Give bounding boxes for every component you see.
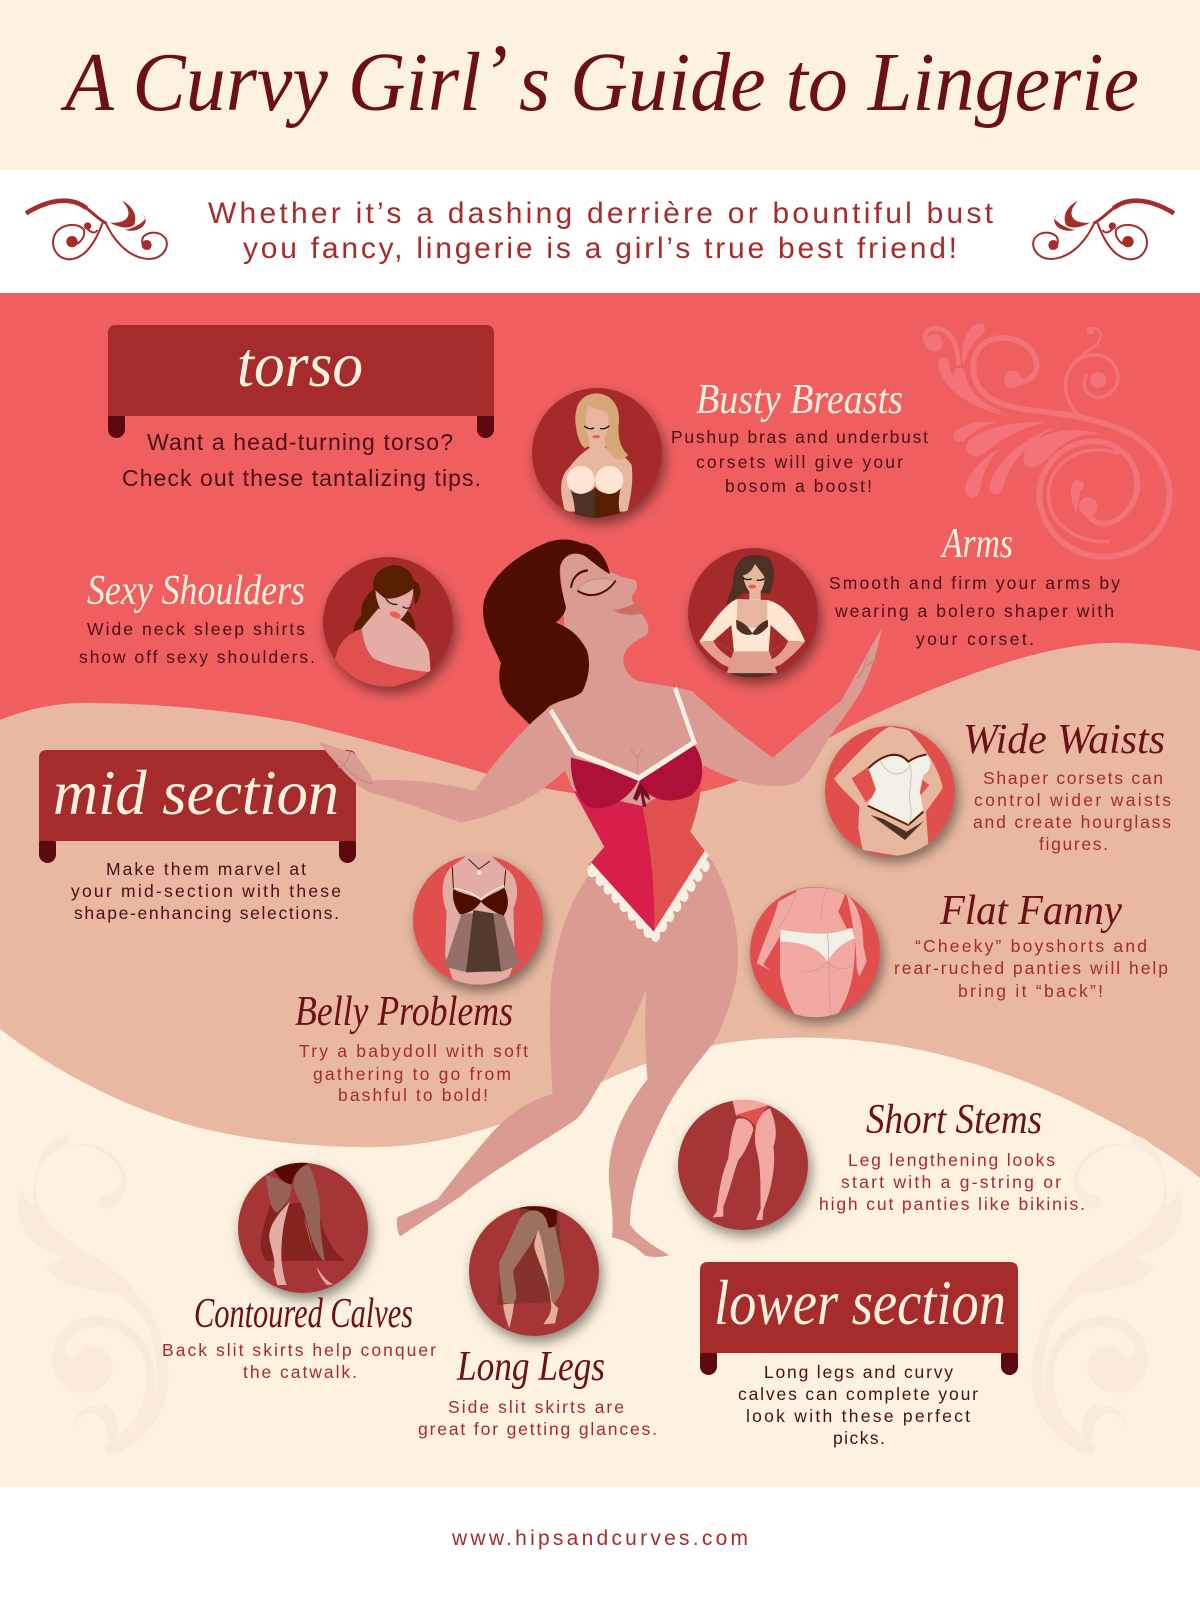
text: flat fanny: bring it “back”! xyxy=(958,981,1103,1001)
intro: lower section xyxy=(738,1362,978,1448)
text: wide waists xyxy=(963,717,1171,854)
intro: lower section: calves can complete your xyxy=(738,1384,978,1404)
title: Guide to Lingerie xyxy=(571,36,1168,129)
text: contoured calves: Contoured Calves xyxy=(194,1291,413,1337)
flourish left xyxy=(26,201,167,259)
text: belly problems: Try a babydoll with soft xyxy=(299,1041,528,1061)
circle: belly problems xyxy=(413,853,543,987)
banner: lower section xyxy=(700,1262,1018,1375)
title: ’ xyxy=(481,28,506,121)
ornament: bottom left xyxy=(18,1134,168,1456)
subtitle: Whether it’s a dashing derrière or bountiful bust xyxy=(208,197,994,230)
text: busty breasts: corsets will give your xyxy=(696,452,903,472)
text: contoured calves: the catwalk. xyxy=(243,1362,357,1382)
text: arms: Smooth and firm your arms by xyxy=(829,573,1120,593)
text: short stems: Leg lengthening looks xyxy=(848,1150,1055,1170)
intro: torso: Check out these tantalizing tips. xyxy=(122,465,481,491)
hair xyxy=(483,540,610,724)
text: belly problems: gathering to go from xyxy=(313,1064,511,1084)
banner: lower section: lower section xyxy=(714,1267,1006,1338)
intro: mid section: shape-enhancing selections. xyxy=(74,903,339,923)
text: flat fanny: “Cheeky” boyshorts and xyxy=(915,936,1147,956)
text: wide waists: Shaper corsets can xyxy=(983,768,1163,788)
text: contoured calves: Back slit skirts help conquer xyxy=(162,1340,436,1360)
text: arms: your corset. xyxy=(916,629,1034,649)
text: short stems: Short Stems xyxy=(866,1097,1042,1143)
text: contoured calves xyxy=(162,1291,436,1382)
title: A Curvy Girl xyxy=(65,36,502,129)
intro: lower section: Long legs and curvy xyxy=(764,1362,953,1382)
text: flat fanny: Flat Fanny xyxy=(939,888,1122,934)
face details xyxy=(571,570,643,615)
flourish right xyxy=(1033,201,1174,259)
title: s xyxy=(499,36,550,129)
corset xyxy=(551,688,710,939)
circle: flat fanny xyxy=(750,882,880,1018)
text: short stems xyxy=(819,1097,1085,1214)
text: busty breasts: bosom a boost! xyxy=(725,476,872,496)
intro: lower section: picks. xyxy=(833,1428,885,1448)
text: busty breasts: Pushup bras and underbust xyxy=(671,427,928,447)
circle: sexy shoulders xyxy=(323,557,453,688)
banner: mid section: mid section xyxy=(53,757,339,828)
text: sexy shoulders xyxy=(79,568,315,667)
text: sexy shoulders: Sexy Shoulders xyxy=(87,568,305,614)
website url: www.hipsandcurves.com xyxy=(451,1527,748,1550)
banner: torso: torso xyxy=(237,329,363,400)
text: wide waists: and create hourglass xyxy=(973,812,1171,832)
text: flat fanny xyxy=(894,888,1168,1001)
text: flat fanny: rear-ruched panties will help xyxy=(894,958,1168,978)
central figure xyxy=(318,540,882,1257)
text: long legs: Long Legs xyxy=(456,1344,605,1390)
subtitle: you fancy, lingerie is a girl’s true best friend! xyxy=(243,232,957,265)
circle: arms xyxy=(688,548,818,678)
circle: short stems xyxy=(678,1097,808,1230)
intro: mid section xyxy=(71,859,341,923)
subtitle xyxy=(208,197,994,265)
ornament: top right swirl xyxy=(925,323,1170,557)
text: belly problems: Belly Problems xyxy=(295,989,513,1035)
banner: torso xyxy=(108,325,494,438)
intro: torso xyxy=(122,429,481,491)
text: busty breasts xyxy=(671,377,928,496)
circle: contoured calves xyxy=(238,1160,368,1293)
text: sexy shoulders: Wide neck sleep shirts xyxy=(87,619,305,639)
text: short stems: high cut panties like bikinis. xyxy=(819,1194,1085,1214)
ornament: bottom right xyxy=(1032,1134,1182,1456)
intro: mid section: Make them marvel at xyxy=(106,859,306,879)
text: wide waists: Wide Waists xyxy=(963,717,1165,763)
text: sexy shoulders: show off sexy shoulders. xyxy=(79,647,315,667)
circle: long legs xyxy=(469,1205,599,1336)
text: arms xyxy=(829,521,1120,649)
intro: mid section: your mid-section with these xyxy=(71,881,341,901)
text: arms: wearing a bolero shaper with xyxy=(834,601,1114,621)
intro: lower section: look with these perfect xyxy=(746,1406,970,1426)
text: arms: Arms xyxy=(940,521,1013,567)
text: long legs: Side slit skirts are xyxy=(448,1397,624,1417)
text: long legs: great for getting glances. xyxy=(418,1419,657,1439)
text: wide waists: control wider waists xyxy=(974,790,1171,810)
banner: mid section xyxy=(39,750,356,863)
circle: wide waists xyxy=(825,726,955,857)
intro: torso: Want a head-turning torso? xyxy=(147,429,453,455)
text: belly problems xyxy=(295,989,528,1105)
text: short stems: start with a g-string or xyxy=(841,1172,1061,1192)
text: belly problems: bashful to bold! xyxy=(338,1085,488,1105)
text: long legs xyxy=(418,1344,657,1439)
circle: busty breasts xyxy=(532,388,662,518)
text: busty breasts: Busty Breasts xyxy=(696,377,903,423)
text: wide waists: figures. xyxy=(1039,834,1108,854)
